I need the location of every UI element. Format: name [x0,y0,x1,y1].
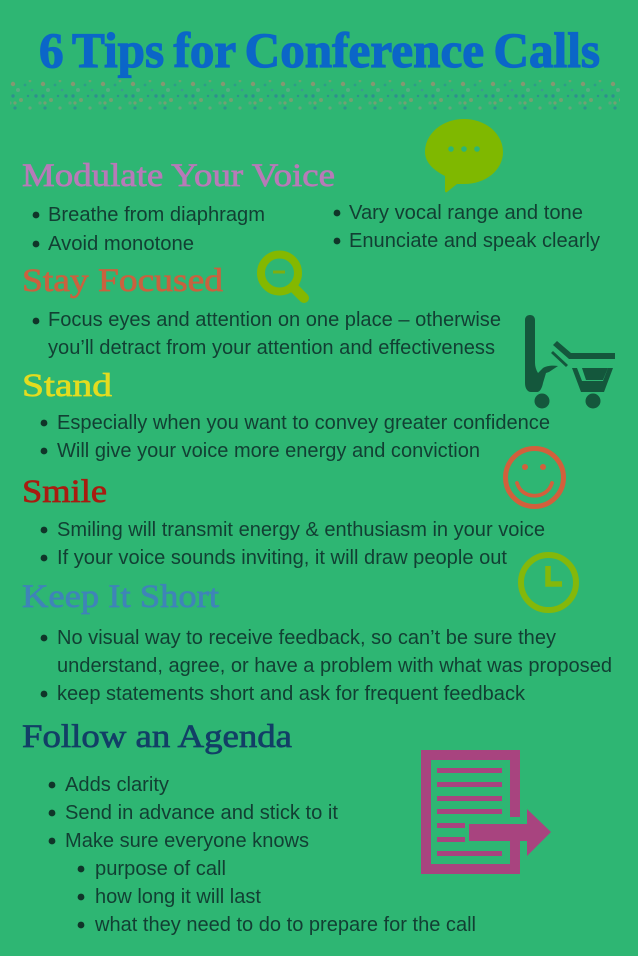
agenda bullets: Make sure everyone knows [65,830,309,852]
icon: speech bubble [425,119,503,192]
stand bullets: Especially when you want to convey greater confidence [57,412,550,434]
icon: magnifying glass [261,254,304,298]
heading: Stay Focused: Stay Focused [22,263,224,299]
stay focused text: Focus eyes and attention on one place – otherwise [48,309,501,331]
heading: Smile: Smile [22,474,107,510]
stay focused text [33,309,501,359]
modulate bullets right [334,202,600,252]
smile bullets [41,519,545,569]
icon: document with arrow [421,750,551,874]
keep it short bullets: understand, agree, or have a problem with what was proposed [57,655,612,677]
agenda bullets: how long it will last [95,886,261,908]
agenda bullets [49,774,476,936]
heading: Keep It Short: Keep It Short [22,579,219,615]
modulate bullets right: Vary vocal range and tone [349,202,583,224]
smile bullets: If your voice sounds inviting, it will draw people out [57,547,507,569]
decorative dotted band [10,80,620,111]
icon: clock [521,555,576,610]
stand bullets [41,412,550,462]
smile bullets: Smiling will transmit energy & enthusiasm in your voice [57,519,545,541]
icon: smiley [506,448,564,506]
modulate bullets right: Enunciate and speak clearly [349,230,600,252]
heading: Follow an Agenda: Follow an Agenda [22,719,292,755]
title: 6 Tips for Conference Calls [39,22,600,78]
icon: person with cart [525,315,615,408]
agenda bullets: Adds clarity [65,774,169,796]
modulate bullets left: Avoid monotone [48,233,194,255]
agenda bullets: Send in advance and stick to it [65,802,338,824]
heading: Modulate Your Voice: Modulate Your Voice [22,158,335,194]
modulate bullets left: Breathe from diaphragm [48,204,265,226]
keep it short bullets: keep statements short and ask for frequent feedback [57,683,526,705]
keep it short bullets: No visual way to receive feedback, so can’t be sure they [57,627,556,649]
keep it short bullets [41,627,612,705]
agenda bullets: purpose of call [95,858,226,880]
agenda bullets: what they need to do to prepare for the call [94,914,476,936]
stand bullets: Will give your voice more energy and conviction [57,440,480,462]
stay focused text: you’ll detract from your attention and effectiveness [48,337,495,359]
modulate bullets left [33,204,265,255]
heading: Stand: Stand [22,368,113,404]
